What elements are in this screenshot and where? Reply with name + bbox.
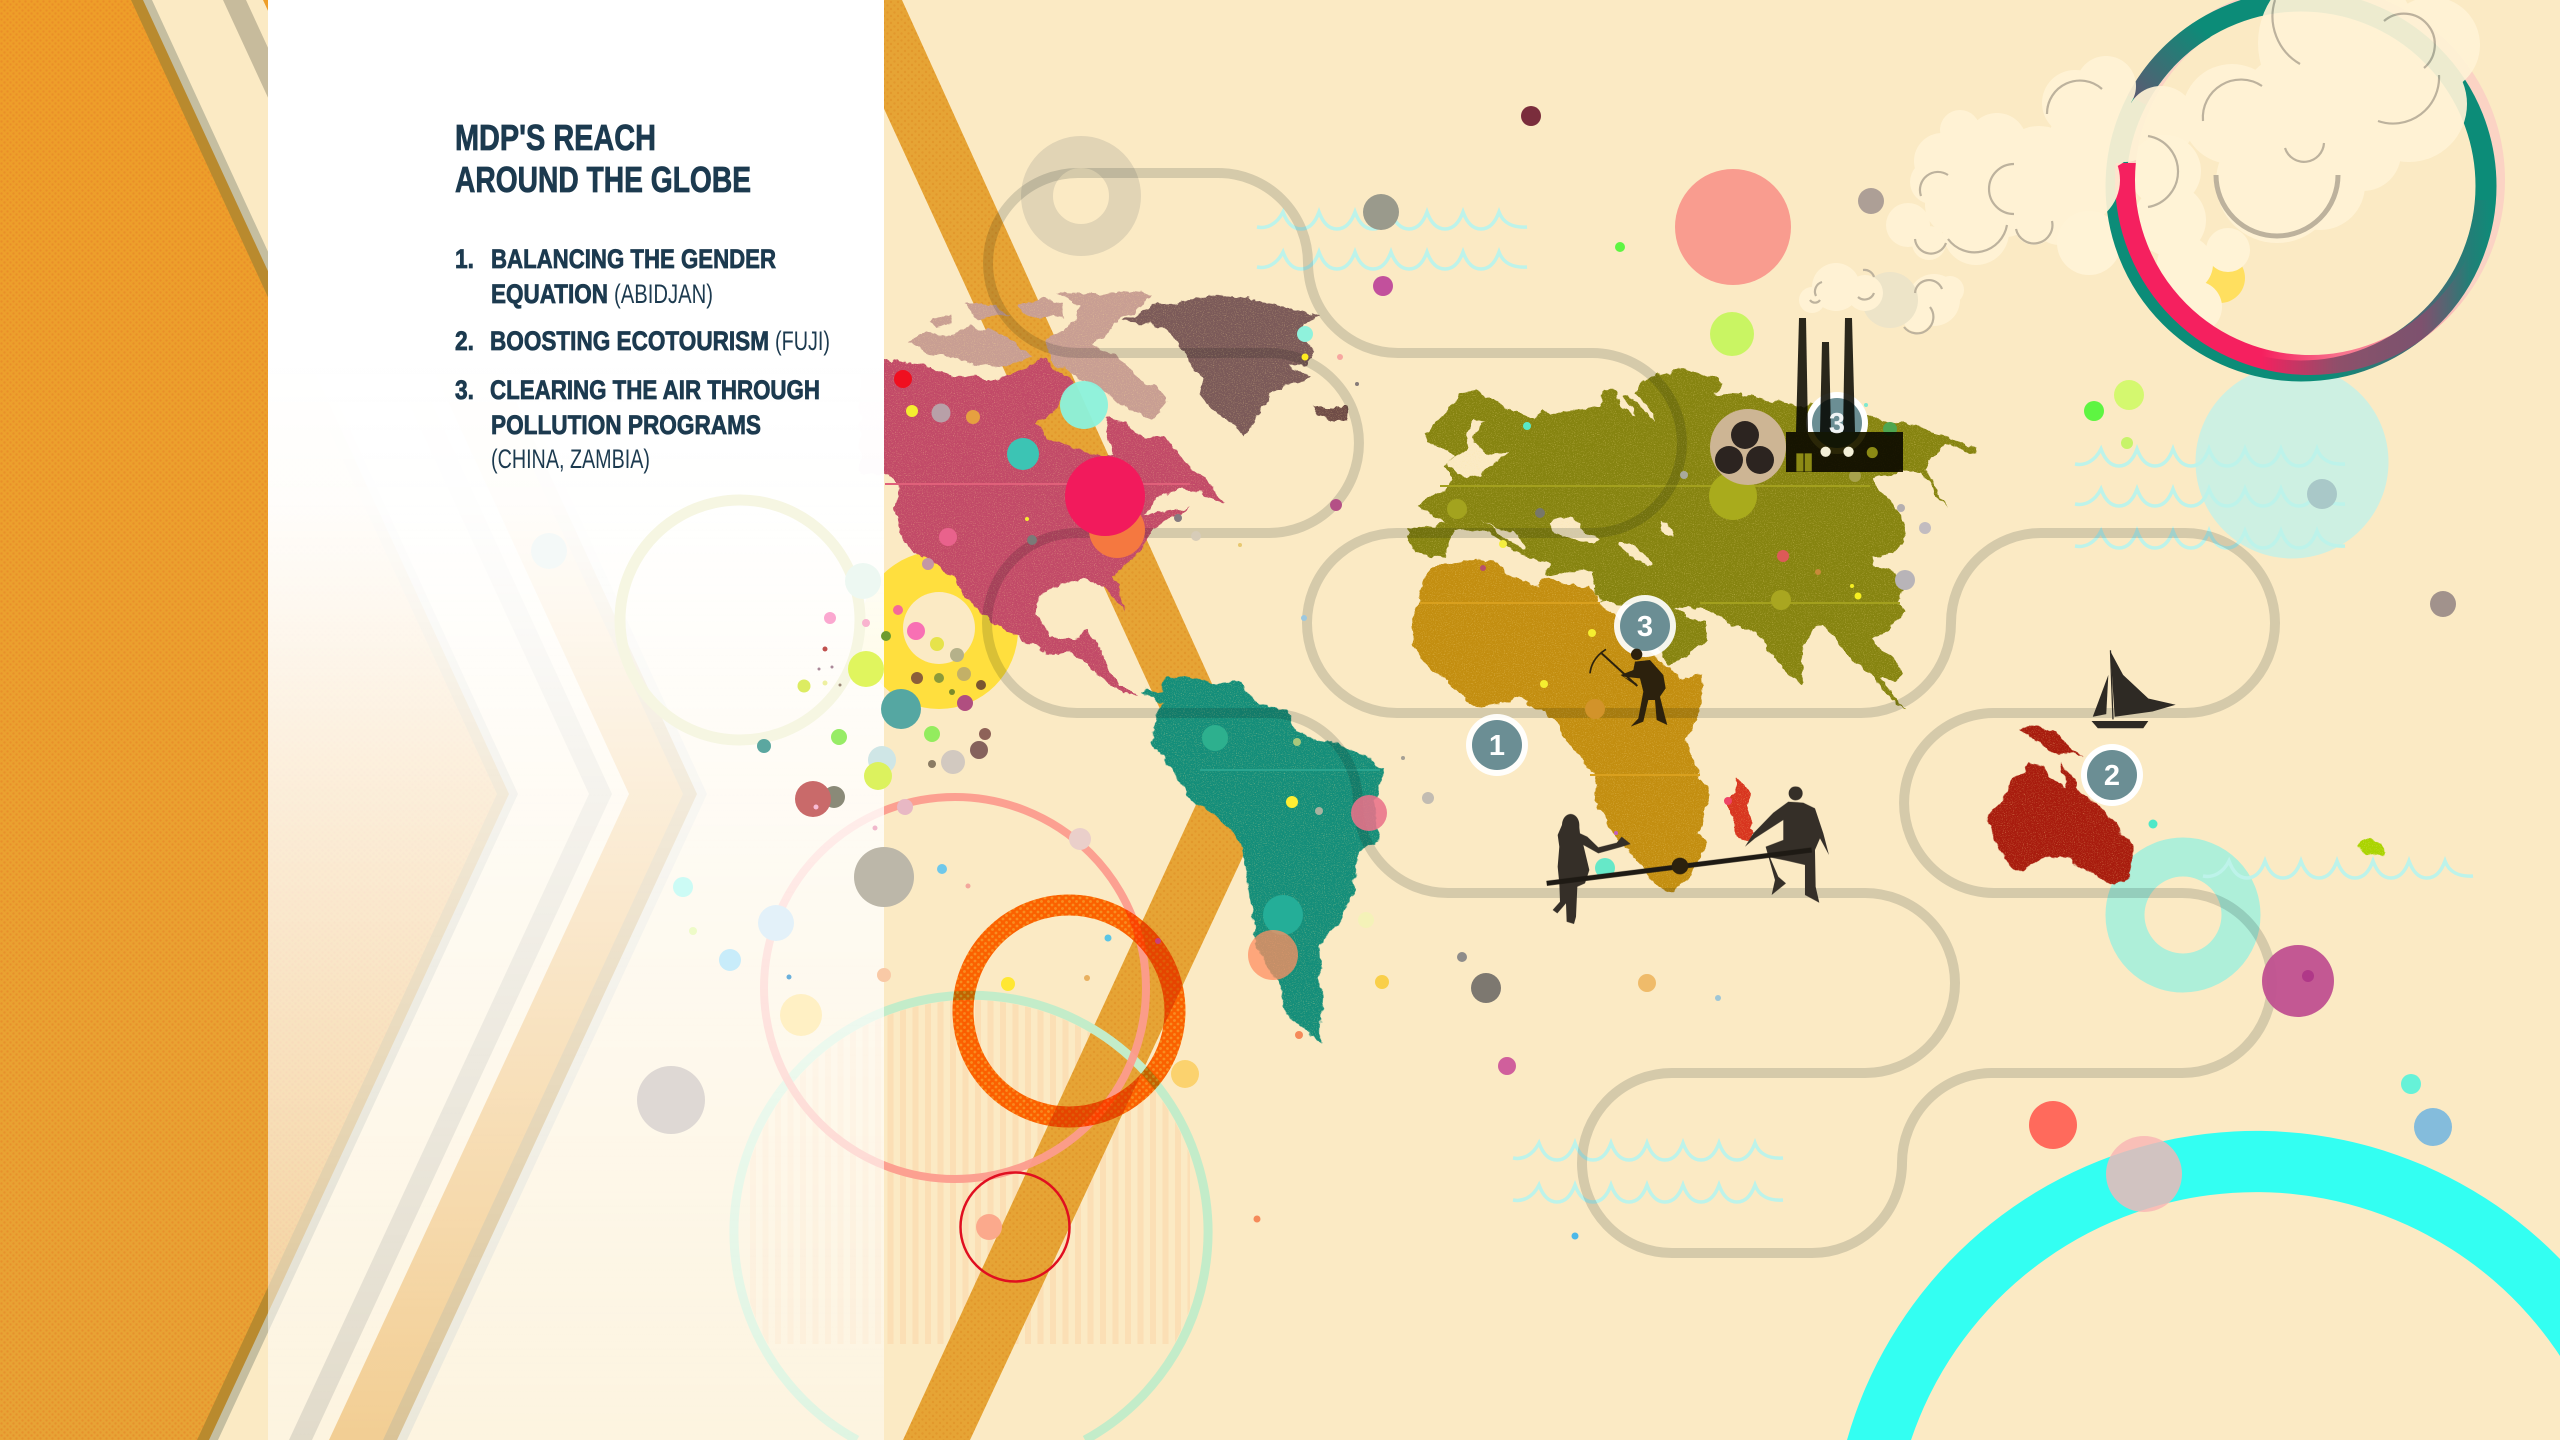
list item 3: [455, 375, 820, 474]
ring: tan top: [1037, 152, 1125, 240]
title: AROUND THE GLOBE: [455, 159, 751, 200]
list item 3: CLEARING THE AIR THROUGH: [490, 375, 820, 405]
list item 1: (ABIDJAN): [614, 279, 713, 309]
number badge 1: 1: [1489, 730, 1505, 762]
yellow ring behind North America: [860, 551, 1018, 709]
ring: orange halftone: [963, 905, 1175, 1117]
diagonal orange band: [834, 0, 1267, 1440]
large ring, top right: [2116, 0, 2495, 371]
list item 2: BOOSTING ECOTOURISM: [490, 326, 769, 356]
number badge 3: 3: [1637, 611, 1653, 643]
number badge 3 at factory: [1806, 392, 1868, 454]
world map: [860, 291, 2384, 1043]
ring: mint: [2125, 857, 2241, 973]
factory chimneys: [1796, 318, 1855, 432]
woman silhouette: [1553, 814, 1631, 924]
striped circle texture: [888, 1000, 1190, 1344]
pale ring on panel: [620, 500, 860, 740]
list item 2: 2.: [455, 326, 474, 356]
man silhouette: [1745, 786, 1829, 903]
smoke clouds: [1799, 0, 2480, 333]
number badge 3: [1614, 595, 1676, 657]
list item 2: (FUJI): [775, 326, 830, 356]
scattered dots: [531, 106, 2456, 1240]
factory icon: [1786, 318, 1903, 472]
map: North America: [860, 359, 1224, 694]
list item 1: [455, 244, 776, 309]
number badge 2: [2081, 744, 2143, 806]
title: MDP'S REACH: [455, 117, 656, 158]
map: arctic islands: [907, 291, 1168, 421]
yellow shape and clouds behind ring: [2057, 135, 2250, 333]
list item 1: EQUATION: [491, 279, 608, 309]
cyan arc: [1847, 1131, 2560, 1440]
serpentine road path: [987, 173, 2275, 1253]
map: Australia and Papua: [1986, 725, 2384, 884]
list item 1: BALANCING THE GENDER: [491, 244, 776, 274]
icon: miner silhouette: [1590, 649, 1667, 727]
large pale teal circle: [2196, 366, 2388, 558]
list item 1: 1.: [455, 244, 474, 274]
map: South America: [1139, 676, 1384, 1043]
heading and list text: [455, 117, 830, 474]
left chevron background: [0, 0, 707, 1440]
map: Greenland and Iceland: [1121, 296, 1348, 436]
ring: pink: [764, 797, 1146, 1179]
icon: gender balance seesaw: [1547, 786, 1829, 924]
icon: sailboat: [2092, 650, 2176, 728]
pollution particles icon: [1710, 409, 1786, 485]
wave marks: [1257, 212, 2473, 1202]
title: [455, 117, 751, 200]
map highlight lines: [885, 484, 1900, 775]
map: Zambia highlight: [1724, 777, 1754, 844]
ring: thin red: [960, 1172, 1070, 1282]
factory door and windows: [1796, 447, 1878, 472]
number badge 2: 2: [2104, 760, 2120, 792]
map: Eurasia: [1406, 370, 1977, 712]
factory base: [1786, 432, 1903, 472]
map: Africa: [1412, 559, 1710, 891]
number badge 1: [1466, 714, 1528, 776]
list item 3: 3.: [455, 375, 474, 405]
badge numeral 3 at factory: 3: [1829, 408, 1845, 440]
seesaw beam: [1547, 850, 1812, 883]
ring: green: [734, 995, 1208, 1440]
list item 3: POLLUTION PROGRAMS: [491, 410, 761, 440]
white text panel: [268, 0, 884, 1440]
list item 3: (CHINA, ZAMBIA): [491, 444, 650, 474]
